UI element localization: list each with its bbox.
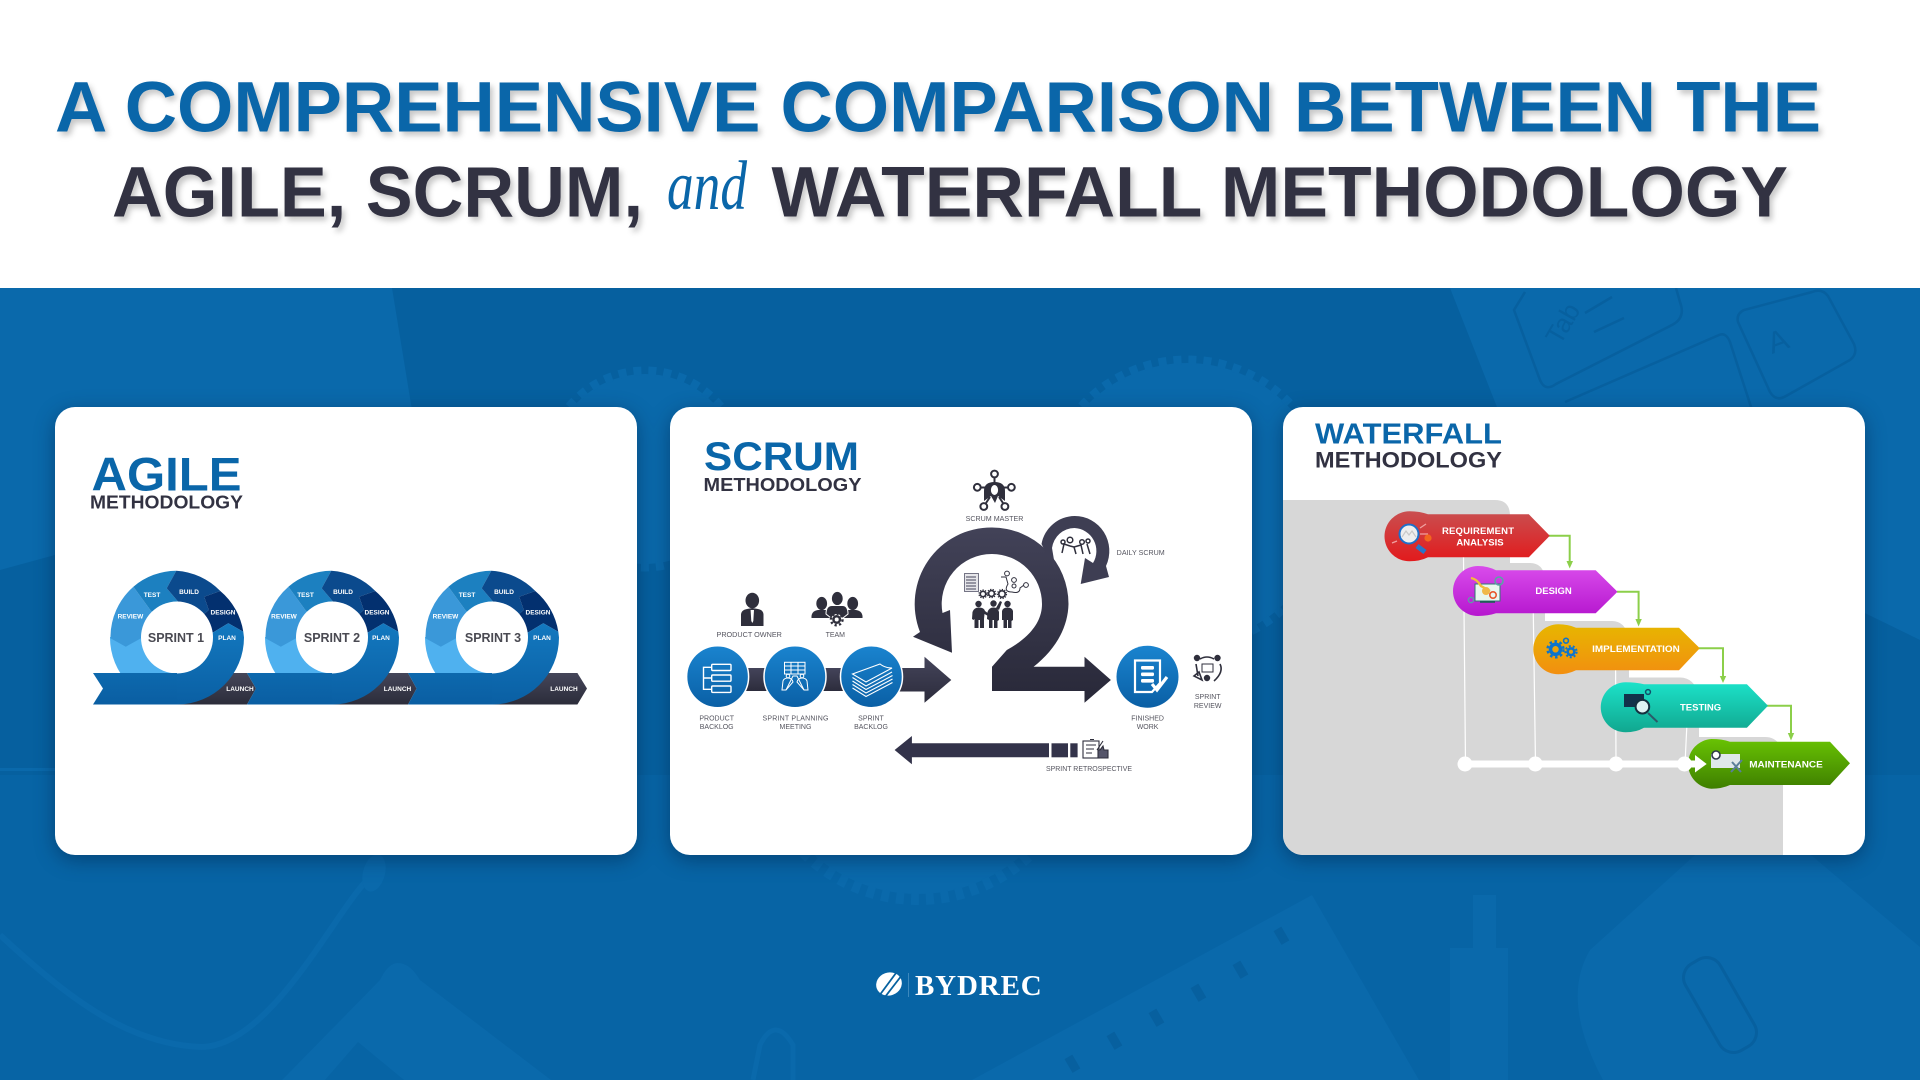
title line 1: A COMPREHENSIVE COMPARISON BETWEEN THE: [55, 68, 1821, 148]
white title band: [0, 0, 1920, 288]
icon: scrum team centre: [964, 571, 1028, 628]
blue background with faint desk objects: A: [1763, 323, 1793, 361]
sprint 3 labels: BUILD: [494, 589, 514, 596]
sprint 3 labels: REVIEW: [433, 614, 459, 621]
sprint 1 labels: PLAN: [218, 635, 236, 642]
step: testing: [1601, 682, 1768, 732]
people: [972, 600, 1013, 628]
sprint 1 banner: [93, 673, 177, 704]
timeline end dot and arrow head: [1677, 755, 1707, 772]
panels: [55, 407, 1865, 855]
step: design: [1453, 566, 1618, 616]
blue background with faint desk objects: [0, 288, 1920, 1080]
timeline: [1458, 557, 1697, 772]
sprint 2 banner: [247, 673, 332, 704]
icon: product owner: [741, 593, 764, 626]
label: sprint retrospective: SPRINT RETROSPECTIVE: [1046, 766, 1132, 773]
labels: scrum stages: SPRINT: [858, 716, 885, 722]
icon: scrum master: [974, 471, 1015, 510]
sprint 1 ring: [110, 571, 244, 704]
icon: sprint review: [1194, 656, 1221, 681]
sprint 1 labels: SPRINT 1: [148, 631, 204, 645]
green connectors: [1549, 536, 1791, 734]
icon: retrospective checklist and thumb: [1083, 740, 1108, 758]
scrum heading: [704, 435, 862, 495]
circle: product backlog: [687, 646, 749, 708]
labels: scrum stages: FINISHED: [1131, 716, 1164, 722]
sprint 3 labels: [433, 589, 578, 693]
icon: testing monitor and magnifier: [1624, 690, 1658, 722]
step: requirement analysis: [1384, 511, 1550, 561]
labels: scrum stages: PRODUCT: [699, 716, 735, 722]
agile heading: METHODOLOGY: [90, 491, 244, 512]
circle: finished work: [1116, 646, 1178, 708]
labels: scrum stages: BACKLOG: [854, 724, 888, 731]
icon: daily scrum team: [1061, 537, 1090, 554]
step: requirement analysis: REQUIREMENT: [1442, 526, 1514, 537]
labels: scrum stages: WORK: [1137, 724, 1159, 731]
panel: agile card: [55, 407, 637, 855]
sprint 2 labels: [271, 589, 412, 693]
agile sprint diagram: [93, 571, 587, 704]
icon: design monitor: [1468, 577, 1503, 603]
scrum heading: SCRUM: [704, 435, 859, 479]
sprint 2 labels: PLAN: [372, 635, 390, 642]
labels: scrum stages: BACKLOG: [700, 724, 734, 731]
sprint 3 labels: LAUNCH: [550, 686, 578, 693]
icon: gears: [1548, 638, 1577, 657]
arrow: sprint retrospective: [895, 736, 1078, 764]
sprint 2 labels: DESIGN: [365, 609, 390, 616]
waterfall diagram: [1283, 500, 1850, 855]
sprint 2 labels: TEST: [297, 592, 314, 599]
sprint 1 labels: LAUNCH: [226, 686, 254, 693]
sprint 1 labels: REVIEW: [118, 614, 144, 621]
route: [1001, 577, 1024, 592]
agile heading: AGILE: [92, 449, 242, 502]
labels: scrum stages: [699, 694, 1222, 731]
checklist: [964, 574, 978, 592]
sprint 2 ring: [265, 571, 399, 704]
sprint 1 labels: [118, 589, 254, 693]
label: scrum master: SCRUM MASTER: [966, 516, 1023, 523]
title: [55, 68, 1821, 232]
labels: scrum stages: MEETING: [780, 724, 811, 731]
logo: bydrec: BYDREC: [915, 970, 1042, 1002]
sprint 1 labels: DESIGN: [211, 609, 236, 616]
step: design: DESIGN: [1535, 586, 1572, 597]
title line 2: waterfall methodology: WATERFALL METHODOLOGY: [772, 154, 1788, 232]
waterfall heading: METHODOLOGY: [1315, 448, 1502, 473]
circle: sprint planning meeting: [764, 646, 826, 708]
labels: scrum stages: REVIEW: [1194, 703, 1222, 710]
labels: scrum stages: SPRINT: [1195, 694, 1221, 701]
sprint connector bars: [745, 668, 844, 691]
icon: backlog list: [704, 664, 731, 692]
sprint 3 labels: DESIGN: [526, 609, 551, 616]
step: implementation: [1533, 624, 1700, 674]
waterfall heading: WATERFALL: [1315, 418, 1502, 450]
icon: paper stack: [852, 664, 892, 696]
step: requirement analysis: ANALYSIS: [1456, 537, 1504, 548]
step: implementation: IMPLEMENTATION: [1592, 644, 1680, 655]
waterfall heading: [1315, 418, 1502, 473]
sprint 3 banner: [408, 673, 492, 704]
sprint loop arrow: [913, 527, 1111, 703]
arrow: into sprint loop: [899, 657, 951, 703]
step: testing: TESTING: [1680, 702, 1721, 713]
icon: finished document: [1135, 660, 1167, 692]
icon: magnifier: [1392, 524, 1432, 552]
gears: [979, 589, 1006, 598]
sprint 3 labels: PLAN: [533, 635, 551, 642]
launch chevron 1: [177, 673, 256, 704]
sprint 1 labels: TEST: [144, 592, 160, 599]
icon: maintenance window and tools: [1711, 751, 1742, 772]
circle: sprint backlog: [840, 646, 902, 708]
labels: scrum stages: SPRINT PLANNING: [762, 716, 828, 722]
sprint 3 labels: TEST: [459, 592, 475, 599]
icon: logo globe: [873, 969, 905, 999]
title line 2: agile, scrum: AGILE, SCRUM,: [112, 154, 643, 232]
label: product owner: PRODUCT OWNER: [716, 632, 782, 639]
panel: waterfall card: [1283, 407, 1865, 855]
step: maintenance: [1677, 739, 1850, 789]
sprint 2 labels: LAUNCH: [384, 686, 412, 693]
blue background with faint desk objects: Tab: [1539, 298, 1586, 349]
panel: scrum card: [670, 407, 1252, 855]
sprint 2 labels: SPRINT 2: [304, 631, 360, 645]
launch chevron 3: [492, 673, 587, 704]
sprint 2 labels: BUILD: [333, 589, 353, 596]
launch chevron 2: [332, 673, 417, 704]
label: team: TEAM: [826, 632, 845, 639]
sprint 3 ring: [425, 571, 559, 704]
sprint 1 labels: BUILD: [179, 589, 199, 596]
grey staircase backdrop: [1283, 500, 1783, 855]
title script word: and: [667, 148, 748, 225]
sprint 2 labels: REVIEW: [271, 614, 298, 621]
label: daily scrum: DAILY SCRUM: [1117, 550, 1165, 557]
step: maintenance: MAINTENANCE: [1749, 759, 1823, 770]
scrum heading: METHODOLOGY: [704, 474, 862, 495]
icon: planning board: [782, 662, 808, 690]
icon: team: [811, 592, 863, 625]
daily scrum loop arrow: [1042, 516, 1109, 584]
sprint 3 labels: SPRINT 3: [465, 631, 521, 645]
